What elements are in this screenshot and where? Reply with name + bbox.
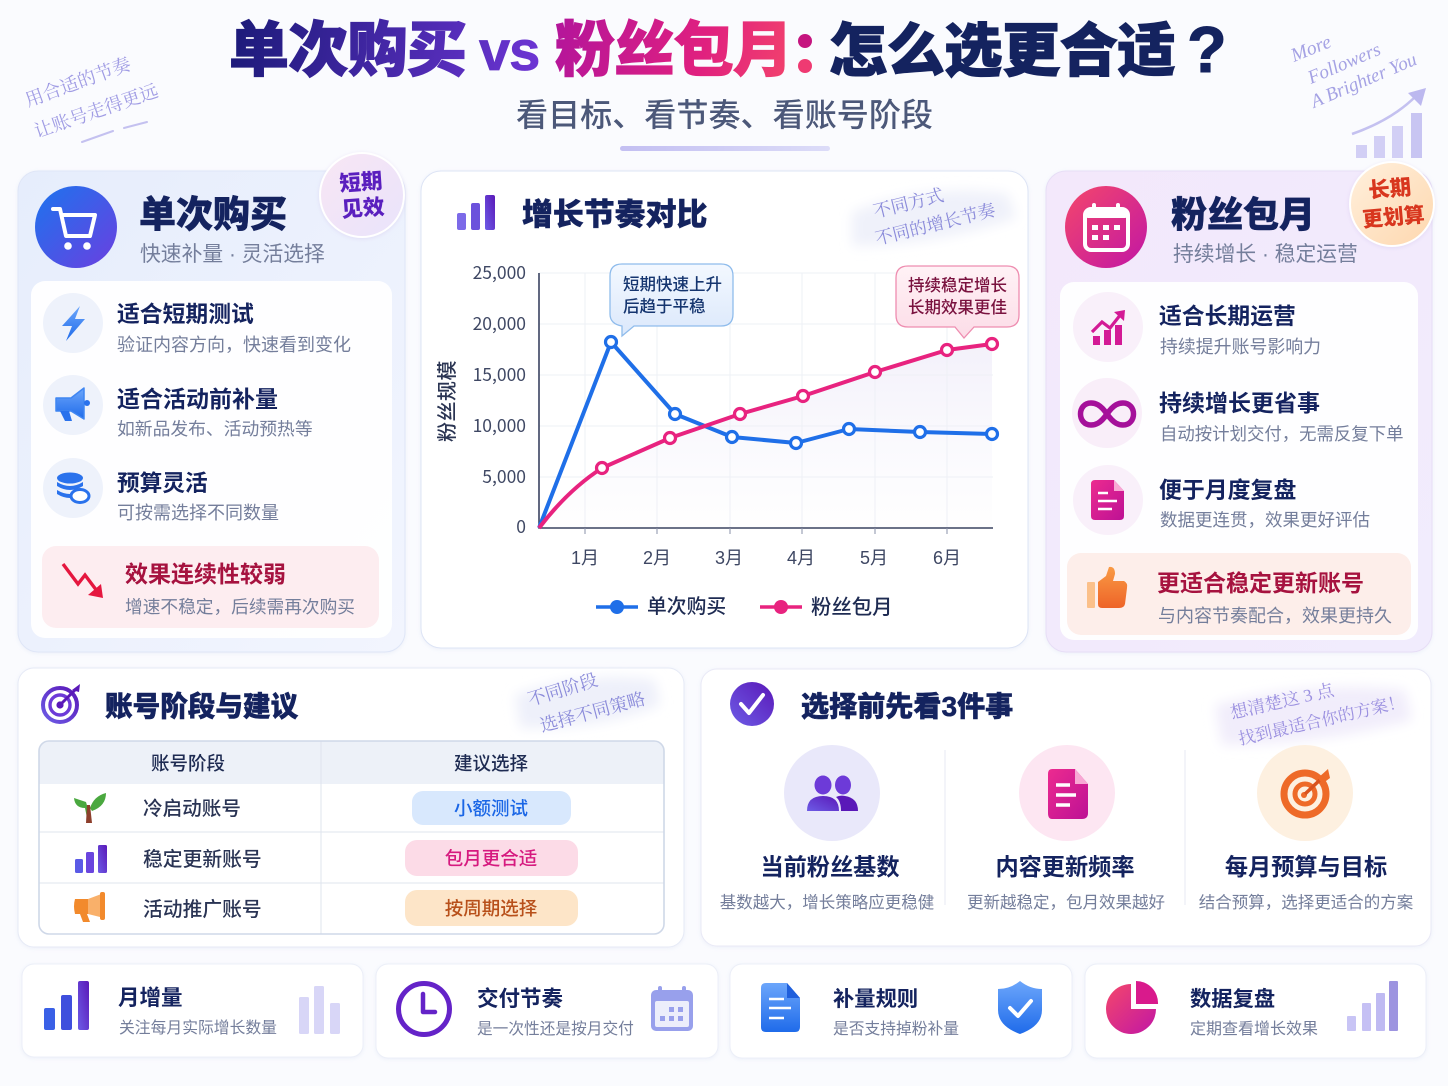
- card: 补量规则: [730, 964, 1072, 1058]
- row: 稳定更新账号: 稳定更新账号: [143, 849, 262, 871]
- handwritten note: 找到最适合你的方案！: [1237, 692, 1407, 749]
- card: 数据复盘: 数据复盘: [1190, 987, 1275, 1011]
- subtitle: 看目标、看节奏、看账号阶段: [516, 97, 933, 133]
- panel: 单次购买: [18, 153, 405, 652]
- icon: bars: [457, 195, 495, 230]
- item: 适合长期运营: 适合长期运营: [1159, 303, 1296, 329]
- y axis labels: [473, 260, 526, 539]
- header title: 单次购买: [229, 17, 466, 84]
- white list card: [1060, 282, 1418, 640]
- panel heading: 单次购买: [139, 194, 287, 235]
- row: 活动推广账号: 按周期选择: [445, 898, 538, 919]
- callout: 短期快速上升: 后趋于平稳: [623, 297, 706, 316]
- x axis labels: 6月: [933, 548, 961, 568]
- item: 适合活动前补量: [43, 375, 313, 439]
- title underline: [620, 146, 830, 151]
- callout: 更适合稳定更新账号: 更适合稳定更新账号: [1157, 570, 1364, 596]
- callout: 效果连续性较弱: [42, 546, 379, 628]
- y axis labels: 20,000: [473, 311, 526, 336]
- badge: 长期更划算: [1350, 162, 1434, 246]
- icon: shield: [998, 981, 1042, 1034]
- badge: 短期见效: 见效: [341, 194, 386, 222]
- icon: blue bars: [44, 981, 89, 1030]
- callout: 更适合稳定更新账号: [1067, 553, 1411, 635]
- item: 持续增长更省事: 持续增长更省事: [1159, 390, 1320, 416]
- white list card: [31, 281, 392, 638]
- item: 便于月度复盘: [1073, 465, 1370, 535]
- icon: faded bars: [299, 986, 340, 1034]
- handwritten note: left: 用合适的节奏: [22, 53, 134, 112]
- y axis title: 粉丝规模: [436, 360, 459, 442]
- card: 补量规则: 是否支持掉粉补量: [833, 1020, 959, 1038]
- icon: rising bars: [1347, 981, 1398, 1031]
- panel: 选择前先看3件事: [701, 669, 1431, 946]
- factor: 当前粉丝基数: 基数越大，增长策略应更稳健: [720, 893, 934, 912]
- icon: document: [761, 983, 800, 1032]
- x axis labels: 1月: [571, 548, 599, 568]
- chart heading: 增长节奏对比: [522, 197, 707, 232]
- badge: 长期更划算: 长期: [1367, 175, 1412, 203]
- card: 月增量: 关注每月实际增长数量: [119, 1019, 277, 1037]
- legend: [596, 596, 893, 619]
- panel subheading: 快速补量 · 灵活选择: [140, 243, 325, 266]
- callout: 持续稳定增长: [896, 266, 1019, 338]
- y axis labels: 10,000: [473, 413, 526, 438]
- item: 适合长期运营: 持续提升账号影响力: [1160, 337, 1321, 357]
- handwritten note and growth icon: right: A Brighter You: [1306, 49, 1420, 113]
- icon: target: [43, 684, 80, 722]
- callout: 短期快速上升: [610, 264, 733, 336]
- badge: 长期更划算: 更划算: [1361, 203, 1426, 232]
- header title: vs: [479, 19, 539, 82]
- callout: 效果连续性较弱: 增速不稳定，后续需再次购买: [125, 597, 355, 617]
- callout: 持续稳定增长: 长期效果更佳: [908, 298, 1007, 317]
- row: 稳定更新账号: [75, 840, 578, 876]
- icon: clock: [398, 984, 450, 1034]
- handwritten note: chart: 不同方式: [871, 185, 946, 222]
- icon: cart: [35, 186, 117, 268]
- card: 交付节奏: 是一次性还是按月交付: [477, 1020, 634, 1038]
- header title: 怎么选更合适: [829, 19, 1175, 84]
- item: 适合短期测试: 验证内容方向，快速看到变化: [117, 335, 351, 355]
- card: 数据复盘: [1085, 964, 1426, 1058]
- handwritten note: 不同阶段: [525, 670, 600, 710]
- row: 活动推广账号: 活动推广账号: [143, 899, 262, 921]
- factor: 每月预算与目标: 每月预算与目标: [1225, 854, 1387, 880]
- y axis labels: 0: [516, 514, 526, 539]
- header title: [229, 13, 1227, 86]
- callout: 持续稳定增长: 持续稳定增长: [908, 275, 1007, 295]
- panel heading: 粉丝包月: [1171, 194, 1315, 235]
- item: 持续增长更省事: [1072, 378, 1403, 448]
- callout: 更适合稳定更新账号: 与内容节奏配合，效果更持久: [1158, 606, 1392, 626]
- callout: 短期快速上升: 短期快速上升: [623, 275, 722, 294]
- item: 便于月度复盘: 数据更连贯，效果更好评估: [1160, 510, 1370, 530]
- item: 适合短期测试: 适合短期测试: [117, 301, 254, 327]
- x axis labels: 5月: [860, 548, 888, 568]
- factor: 每月预算与目标: 结合预算，选择更适合的方案: [1199, 893, 1414, 912]
- x axis labels: 4月: [787, 548, 815, 568]
- handwritten note: chart: [852, 185, 1016, 249]
- panel subheading: 持续增长 · 稳定运营: [1173, 243, 1358, 266]
- icon: calendar: [651, 986, 693, 1031]
- handwritten note: left: [22, 53, 161, 143]
- x axis labels: [571, 548, 961, 568]
- badge: 短期见效: 短期: [339, 169, 383, 196]
- panel heading: 账号阶段与建议: [105, 691, 299, 722]
- handwritten note: 想清楚这 3 点: [1228, 680, 1336, 723]
- series: 单次购买: [539, 336, 998, 528]
- card: 数据复盘: 定期查看增长效果: [1190, 1020, 1318, 1038]
- series: 粉丝包月: [539, 338, 998, 528]
- line chart: [436, 260, 1019, 568]
- header title: ?: [1187, 13, 1227, 86]
- item: 适合短期测试: [43, 293, 351, 355]
- y axis labels: 25,000: [473, 260, 526, 285]
- card: 月增量: [22, 964, 363, 1057]
- table header: 建议选择: [454, 753, 528, 774]
- legend: 粉丝包月: [811, 596, 893, 619]
- handwritten note: [515, 670, 660, 736]
- table header: [151, 753, 528, 774]
- item: 适合活动前补量: 如新品发布、活动预热等: [117, 419, 313, 439]
- dividers: [945, 750, 1185, 905]
- badge: 短期见效: [320, 153, 404, 237]
- row: 冷启动账号: 小额测试: [454, 798, 528, 819]
- handwritten note and growth icon: right: Followers: [1304, 39, 1384, 89]
- legend: 单次购买: [647, 596, 726, 618]
- item: 适合活动前补量: 适合活动前补量: [117, 386, 278, 412]
- y axis labels: 15,000: [473, 362, 526, 387]
- factor: 当前粉丝基数: [720, 745, 934, 912]
- handwritten note: 选择不同策略: [538, 688, 647, 736]
- icon: check: [730, 682, 774, 726]
- handwritten note and growth icon: right: More: [1287, 31, 1335, 67]
- y axis labels: 5,000: [482, 464, 526, 489]
- item: 适合长期运营: [1073, 292, 1321, 362]
- x axis labels: 3月: [715, 548, 743, 568]
- header title: 粉丝包月: [555, 17, 792, 84]
- icon: calendar: [1065, 186, 1147, 268]
- item: 便于月度复盘: 便于月度复盘: [1159, 477, 1296, 503]
- panel: 粉丝包月: [1046, 162, 1434, 652]
- item: 持续增长更省事: 自动按计划交付，无需反复下单: [1160, 424, 1403, 444]
- icon: pie chart: [1106, 981, 1158, 1034]
- table header: 账号阶段: [151, 753, 225, 774]
- card: 交付节奏: [376, 964, 718, 1058]
- handwritten note and growth icon: right: [1287, 31, 1426, 158]
- card: 交付节奏: 交付节奏: [477, 986, 564, 1011]
- handwritten note: left: 让账号走得更远: [32, 81, 161, 143]
- factor: 内容更新频率: 更新越稳定，包月效果越好: [967, 893, 1165, 912]
- row: 冷启动账号: [74, 791, 571, 825]
- factor: 当前粉丝基数: 当前粉丝基数: [760, 854, 900, 880]
- handwritten note: chart: 不同的增长节奏: [873, 200, 998, 249]
- panel: 账号阶段与建议: [18, 668, 684, 947]
- factor: 内容更新频率: 内容更新频率: [995, 854, 1135, 880]
- item: 预算灵活: 预算灵活: [117, 470, 208, 496]
- callout: 效果连续性较弱: 效果连续性较弱: [125, 561, 286, 587]
- factor: 每月预算与目标: [1199, 745, 1414, 912]
- panel heading: 选择前先看3件事: [801, 691, 1013, 722]
- table: [39, 741, 664, 934]
- row: 稳定更新账号: 包月更合适: [445, 848, 537, 869]
- row: 活动推广账号: [74, 890, 578, 926]
- x axis labels: 2月: [643, 548, 671, 568]
- row: 冷启动账号: 冷启动账号: [143, 798, 241, 820]
- panel: 增长节奏对比: [421, 171, 1028, 648]
- item: 预算灵活: 可按需选择不同数量: [117, 503, 279, 523]
- card: 月增量: 月增量: [118, 986, 183, 1010]
- card: 补量规则: 补量规则: [833, 987, 918, 1011]
- factor: 内容更新频率: [967, 745, 1165, 912]
- item: 预算灵活: [43, 458, 279, 523]
